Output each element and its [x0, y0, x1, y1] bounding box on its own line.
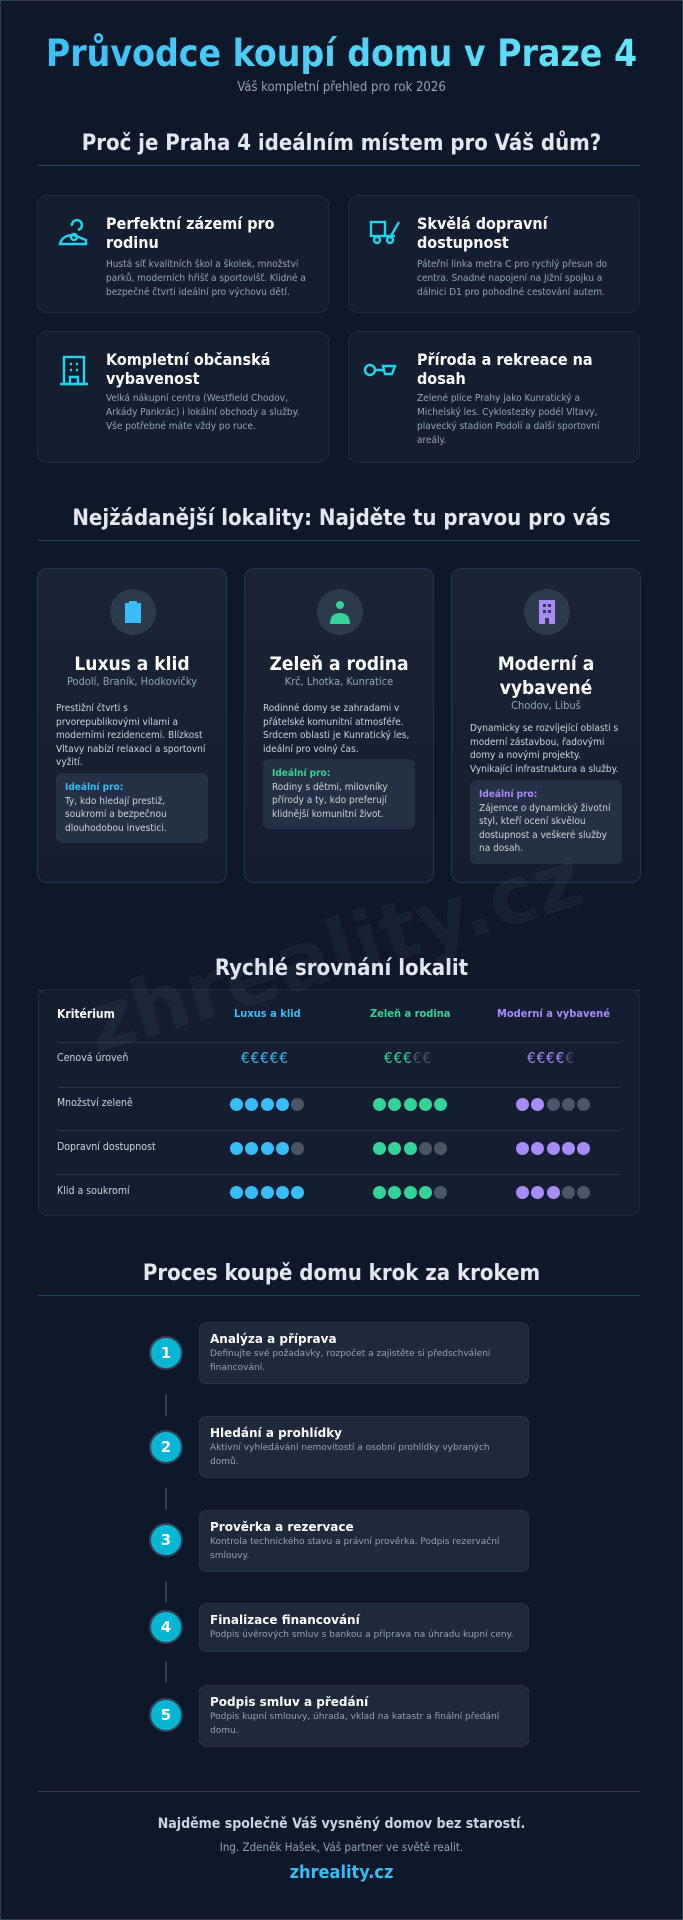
text: Analýza a příprava	[210, 1332, 337, 1346]
heading: process: Proces koupě domu krok za krokem	[143, 1261, 540, 1286]
ideal for: Ideální pro:	[272, 768, 330, 779]
step 2: 2	[161, 1438, 171, 1456]
row: quiet: Klid a soukromí	[57, 1185, 130, 1197]
text: Hledání a prohlídky	[210, 1426, 342, 1440]
text: Zelené plíce Prahy jako Kunratický a Michelský les. Cyklostezky podél Vltavy, plavecký stadion Podolí a další sportovní areály.	[417, 393, 600, 446]
districts: Podolí, Braník, Hodkovičky	[67, 675, 197, 688]
panel: transport	[348, 195, 640, 313]
heading: Příroda a rekreace na	[417, 350, 593, 369]
text: Velká nákupní centra (Westfield Chodov, Arkády Pankrác) i lokální obchody a služby. Vše potřebné máte vždy po ruce.	[106, 393, 299, 432]
title: vybavené	[500, 677, 592, 699]
row: price: €€€€€	[527, 1049, 575, 1067]
panel: amenities	[37, 331, 329, 463]
heading	[106, 214, 275, 252]
step 1	[149, 1336, 183, 1370]
text: Kontrola technického stavu a právní prověrka. Podpis rezervační smlouvy.	[210, 1537, 499, 1560]
icon: family	[58, 218, 88, 246]
ideal for	[470, 780, 622, 864]
comparison table	[38, 989, 640, 1216]
title	[498, 653, 594, 699]
step 3: 3	[161, 1531, 171, 1549]
description: Dynamicky se rozvíjející oblasti s moderní zástavbou, řadovými domy a novými projekty. Vynikající infrastruktura a služby.	[470, 723, 618, 774]
panel: zeleň a rodina	[244, 568, 434, 883]
row: price: €€€€€	[384, 1049, 432, 1067]
text: Najděme společně Váš vysněný domov bez starostí.	[158, 1816, 525, 1832]
heading: Kompletní občanská	[106, 350, 270, 369]
step 4	[149, 1610, 183, 1644]
icon: building	[60, 356, 88, 386]
panel: luxus a klid	[37, 568, 227, 883]
subtitle: Váš kompletní přehled pro rok 2026	[237, 80, 446, 95]
ideal for: Ideální pro:	[65, 782, 123, 793]
text: zhreality.cz	[290, 1862, 393, 1883]
title: Moderní a	[498, 653, 594, 675]
row: price: €€€€€	[241, 1049, 289, 1067]
ideal for: Rodiny s dětmi, milovníky přírody a ty, kdo preferují klidnější komunitní život.	[272, 782, 388, 820]
row: greenery	[57, 1097, 590, 1111]
header row: Luxus a klid	[234, 1007, 301, 1020]
ideal for	[263, 759, 415, 829]
heading: dosah	[417, 369, 466, 388]
heading: dostupnost	[417, 233, 509, 252]
text: Definujte své požadavky, rozpočet a zajistěte si předschválení financování.	[210, 1349, 490, 1372]
text: Prověrka a rezervace	[210, 1520, 354, 1534]
text: Podpis úvěrových smluv s bankou a příprava na úhradu kupní ceny.	[210, 1630, 514, 1640]
icon: glasses	[364, 364, 397, 376]
text: Aktivní vyhledávání nemovitostí a osobní prohlídky vybraných domů.	[210, 1443, 490, 1466]
step 4: 4	[161, 1618, 171, 1636]
text: Páteřní linka metra C pro rychlý přesun do centra. Snadné napojení na Jižní spojku a dálnici D1 pro pohodlné cestování autem.	[417, 259, 607, 298]
heading: localities: Nejžádanější lokality: Najděte tu pravou pro vás	[72, 506, 611, 531]
row: greenery: Množství zeleně	[57, 1097, 133, 1109]
watermark: zhreality.cz	[75, 832, 593, 1071]
icon: transport	[370, 220, 400, 244]
header row: Moderní a vybavené	[497, 1007, 610, 1020]
row: price	[57, 1049, 575, 1067]
heading	[417, 214, 548, 252]
districts: Krč, Lhotka, Kunratice	[285, 675, 393, 688]
title: Zeleň a rodina	[269, 653, 408, 675]
heading: rodinu	[106, 233, 159, 252]
heading	[106, 350, 270, 388]
text: Hustá síť kvalitních škol a školek, množství parků, moderních hřišť a sportovišť. Klidné a bezpečné čtvrti ideální pro výchovu dětí.	[106, 259, 306, 298]
panel: nature	[348, 331, 640, 463]
icon: person	[317, 589, 363, 635]
heading	[417, 350, 593, 388]
ideal for	[56, 773, 208, 843]
row: price: Cenová úroveň	[57, 1052, 128, 1064]
header row: Kritérium	[57, 1007, 115, 1021]
step 5: 5	[161, 1706, 171, 1724]
header row: Zeleň a rodina	[370, 1007, 450, 1020]
text: Podpis smluv a předání	[210, 1695, 368, 1709]
row: transport: Dopravní dostupnost	[57, 1141, 156, 1153]
title: Luxus a klid	[74, 653, 190, 675]
ideal for: Ideální pro:	[479, 789, 537, 800]
icon: building	[524, 589, 570, 635]
heading: Skvělá dopravní	[417, 214, 548, 233]
ideal for: Ty, kdo hledají prestiž, soukromí a bezpečnou dlouhodobou investici.	[65, 796, 167, 834]
heading: comparison: Rychlé srovnání lokalit	[215, 956, 468, 981]
text: Ing. Zdeněk Hašek, Váš partner ve světě realit.	[220, 1840, 463, 1854]
ideal for: Zájemce o dynamický životní styl, kteří ocení skvělou dostupnost a veškeré služby na dosah.	[479, 802, 610, 854]
text: Podpis kupní smlouvy, úhrada, vklad na katastr a finální předání domu.	[210, 1712, 499, 1736]
heading: why Praha 4: Proč je Praha 4 ideálním místem pro Váš dům?	[82, 131, 601, 156]
step 5	[149, 1698, 183, 1732]
footer	[38, 1791, 640, 1792]
header row	[57, 1007, 610, 1021]
row: transport	[57, 1141, 590, 1155]
title: Průvodce koupí domu v Praze 4	[46, 32, 637, 75]
icon: clipboard	[110, 589, 156, 635]
text: Finalizace financování	[210, 1613, 360, 1627]
districts: Chodov, Libuš	[511, 699, 581, 712]
description: Prestižní čtvrti s prvorepublikovými vilami a moderními rezidencemi. Blízkost Vltavy nabízí relaxaci a sportovní vyžití.	[56, 703, 205, 768]
panel: moderní a vybavené	[451, 568, 641, 883]
step 1: 1	[161, 1344, 171, 1362]
heading: vybavenost	[106, 369, 200, 388]
panel: family	[37, 195, 329, 313]
step 2	[149, 1430, 183, 1464]
row: quiet	[57, 1185, 590, 1199]
description: Rodinné domy se zahradami v přátelské komunitní atmosféře. Srdcem oblasti je Kunratický les, ideální pro volný čas.	[263, 703, 409, 754]
step 3	[149, 1523, 183, 1557]
heading: Perfektní zázemí pro	[106, 214, 275, 233]
